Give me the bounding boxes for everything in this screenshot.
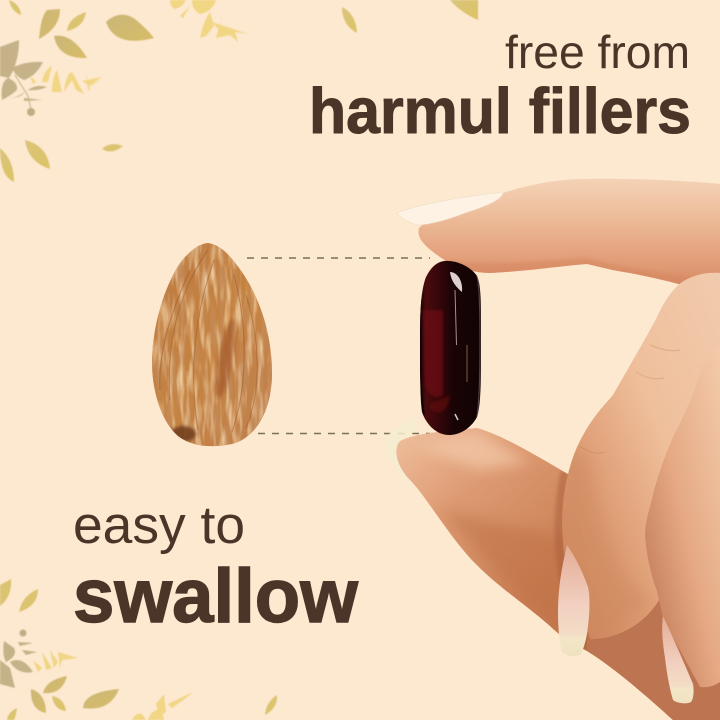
middle finger bbox=[558, 273, 720, 656]
ring finger nail bbox=[662, 616, 694, 703]
decorative leaves: bottom left cluster bbox=[0, 579, 277, 720]
capsule highlights bbox=[450, 272, 462, 292]
palm below fingers bbox=[587, 590, 720, 720]
middle finger nail bbox=[558, 545, 590, 656]
softgel capsule bbox=[420, 261, 481, 435]
heading line: easy to: easy to bbox=[73, 496, 245, 555]
thumb and palm bbox=[385, 418, 720, 720]
heading: free from harmul fillers bbox=[309, 26, 691, 147]
heading: easy to swallow bbox=[73, 496, 359, 639]
decorative sprig: yellow branch left bbox=[30, 66, 102, 94]
decorative sprig: yellow branch top bbox=[170, 0, 248, 42]
decorative sprig: yellow branches bottom bbox=[33, 650, 193, 720]
capsule red glow bbox=[423, 310, 443, 397]
thumb nail bbox=[385, 418, 417, 488]
heading line: swallow: swallow bbox=[73, 554, 359, 639]
decorative leaves: top left cluster bbox=[0, 0, 478, 182]
almond bbox=[150, 240, 276, 450]
heading line: free from: free from bbox=[505, 26, 690, 78]
ring finger bbox=[645, 345, 720, 703]
hand holding capsule bbox=[385, 179, 720, 720]
index finger nail bbox=[397, 192, 503, 225]
index finger bbox=[397, 179, 720, 296]
heading line: harmul fillers: harmul fillers bbox=[309, 75, 691, 147]
dashed guide lines comparing almond and capsule bbox=[247, 258, 430, 434]
